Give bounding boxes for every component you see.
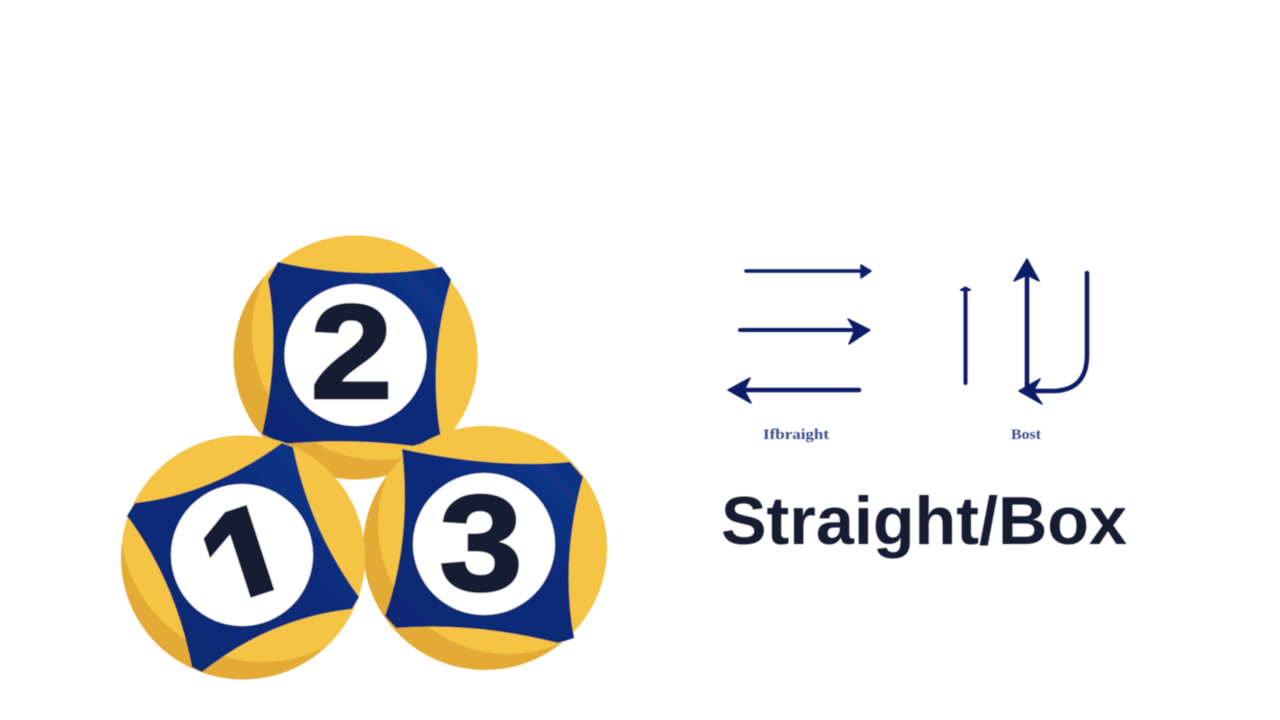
up arrow — [1014, 259, 1039, 388]
arrow 2 right — [740, 319, 870, 344]
arrows: box — [961, 259, 1087, 404]
label: straight: Ifbraight — [763, 427, 829, 443]
title: Straight/Box — [721, 483, 1127, 559]
number balls group — [120, 234, 608, 680]
ball 2 — [232, 234, 478, 480]
infographic canvas — [120, 234, 1127, 680]
arrow 1 right — [746, 265, 871, 278]
ball 1 — [120, 434, 366, 680]
digit 2: 2 — [311, 276, 392, 427]
arrow 3 left — [728, 378, 859, 403]
arrows: straight — [728, 265, 871, 403]
label: box: Bost — [1011, 427, 1041, 443]
ball 3 — [362, 425, 608, 671]
curved return arrow — [1019, 273, 1087, 404]
digit 3: 3 — [439, 468, 523, 619]
single vertical line — [961, 288, 970, 383]
digit 1: 1 — [178, 464, 318, 662]
